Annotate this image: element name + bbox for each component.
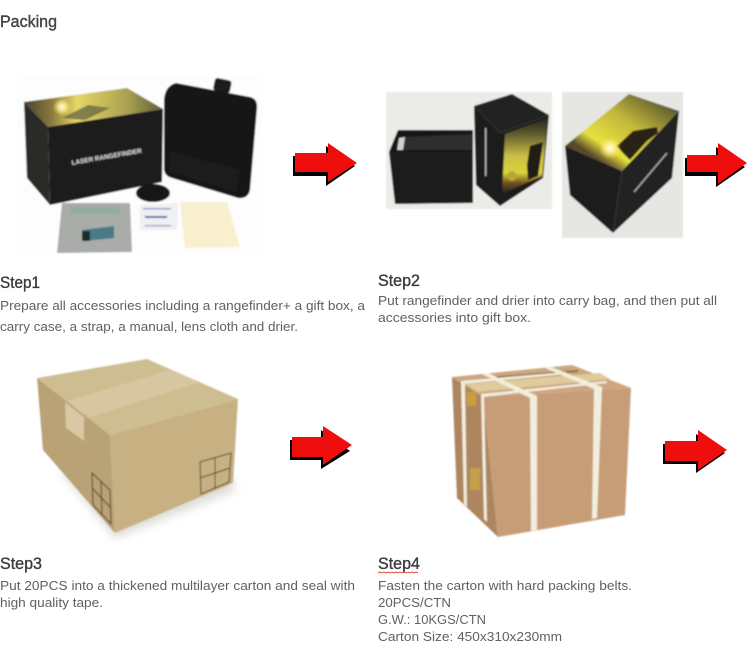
step 4 text: G.W.: 10KGS/CTN bbox=[378, 612, 486, 627]
step 1 text: Step1 bbox=[0, 274, 40, 292]
arrow 2 bbox=[685, 143, 747, 187]
step 1 text: carry case, a strap, a manual, lens cloth and drier. bbox=[0, 319, 298, 334]
gift box bbox=[24, 88, 163, 205]
card bbox=[140, 203, 178, 230]
packing belts bbox=[461, 367, 607, 531]
step 2 text: Step2 bbox=[378, 272, 420, 290]
photo: step 1 accessories bbox=[17, 77, 262, 254]
carry bag bbox=[164, 77, 257, 198]
step 4 text: 20PCS/CTN bbox=[378, 595, 451, 610]
step 2 text: accessories into gift box. bbox=[378, 310, 531, 325]
step 3 text bbox=[0, 555, 355, 610]
arrow 4 bbox=[663, 430, 727, 473]
step 3 text: Step3 bbox=[0, 555, 42, 573]
step 3 text: high quality tape. bbox=[0, 595, 103, 610]
photo: step 3 sealed carton bbox=[37, 359, 238, 538]
arrow 1 bbox=[293, 143, 357, 186]
step 1 text: Prepare all accessories including a rangefinder+ a gift box, a bbox=[0, 298, 366, 313]
step 4 text: Step4 bbox=[378, 555, 420, 573]
step 2 text: Put rangefinder and drier into carry bag, and then put all bbox=[378, 293, 717, 308]
manual bbox=[57, 203, 132, 253]
gift box: LASER RANGEFINDER bbox=[71, 148, 142, 167]
title: Packing bbox=[0, 13, 57, 31]
photo: step 4 belted carton bbox=[452, 365, 631, 537]
arrow 3 bbox=[290, 426, 352, 469]
step 4 text: Fasten the carton with hard packing belts. bbox=[378, 578, 632, 593]
handling marks bbox=[92, 453, 231, 524]
step 2 text bbox=[378, 272, 717, 325]
step 3 text: Put 20PCS into a thickened multilayer carton and seal with bbox=[0, 578, 355, 593]
tall box bbox=[474, 94, 549, 206]
photo: step 2 closed box bbox=[562, 92, 683, 238]
strap bbox=[136, 184, 170, 202]
step 4 text bbox=[378, 555, 632, 644]
lens cloth bbox=[180, 202, 240, 248]
open box bbox=[389, 130, 473, 204]
step 4 text: Carton Size: 450x310x230mm bbox=[378, 629, 562, 644]
step 1 text bbox=[0, 274, 366, 334]
photo: step 2 open box and tall box bbox=[386, 92, 552, 209]
